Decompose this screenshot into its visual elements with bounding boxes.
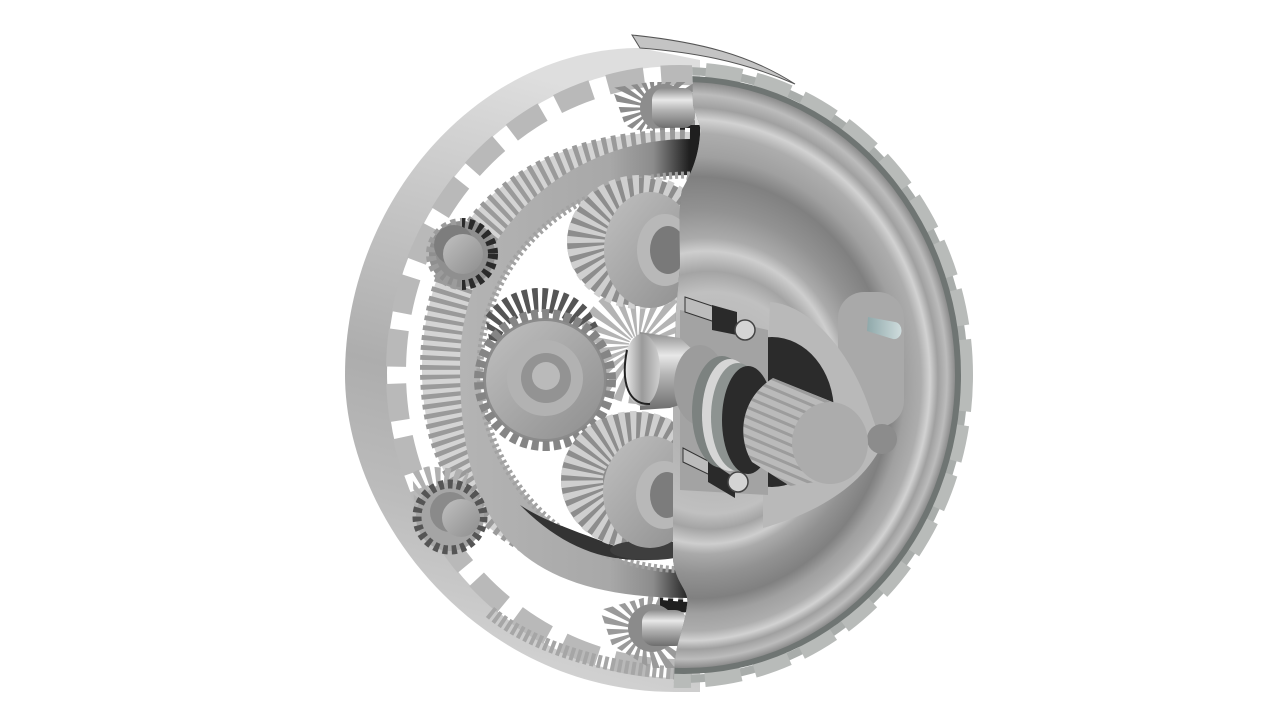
lower bearing block <box>708 460 735 498</box>
pinion upper left <box>429 221 495 287</box>
helical outer teeth <box>420 130 690 600</box>
rim shadow ring <box>673 76 961 674</box>
ring gear <box>420 130 690 600</box>
lower internal teeth strip <box>490 612 675 673</box>
bottom pinion <box>615 590 692 660</box>
sleeve opening <box>624 334 660 406</box>
upper bearing block <box>712 305 737 335</box>
top pinion <box>625 78 700 185</box>
illustration: planetary gear assembly cutaway <box>345 34 973 692</box>
upper roller <box>685 297 715 322</box>
splined shaft <box>743 378 840 486</box>
sun gear helical teeth <box>604 311 672 379</box>
cover backing <box>680 310 768 495</box>
sleeve <box>640 332 695 410</box>
arm plate <box>838 292 904 427</box>
shadow crescent <box>520 505 650 560</box>
upper ball <box>735 320 755 340</box>
drum cavity <box>387 66 690 678</box>
lower roller <box>683 448 710 475</box>
nut <box>867 424 897 454</box>
dished plate <box>673 82 955 668</box>
spline grooves <box>760 365 813 490</box>
stepped collar <box>674 345 726 425</box>
rim teeth <box>674 63 973 688</box>
planet gear lower <box>561 412 709 560</box>
right housing <box>673 63 973 688</box>
shaft end face <box>792 402 868 484</box>
ring inner opening and teeth <box>480 175 690 570</box>
bolt <box>867 317 902 339</box>
drum inner tabs <box>386 65 692 679</box>
planet gear upper <box>567 178 713 308</box>
flat ring face <box>460 139 690 598</box>
rim connecting strip <box>690 67 966 683</box>
centre mechanism <box>624 297 868 498</box>
lower ball <box>728 472 748 492</box>
pinion lower left <box>408 483 484 551</box>
left outer drum <box>345 48 700 692</box>
planet gear left <box>479 300 611 446</box>
top strip <box>632 35 795 84</box>
sleeve edge <box>625 350 650 404</box>
dark bore <box>710 337 834 487</box>
cover plate <box>763 302 882 528</box>
